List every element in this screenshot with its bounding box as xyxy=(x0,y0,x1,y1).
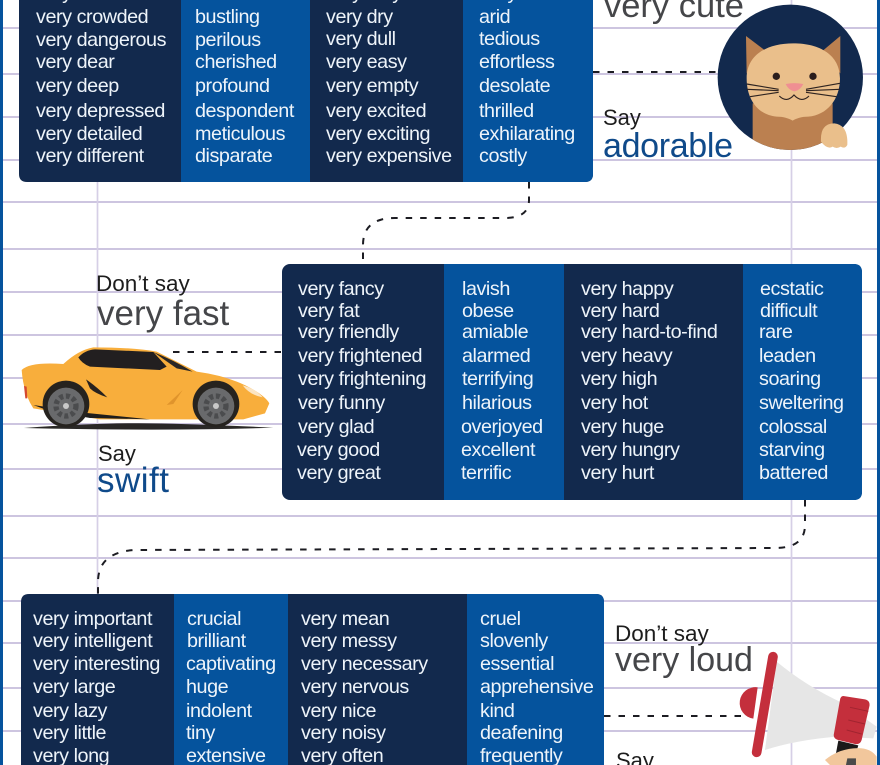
column: very words B: very empty xyxy=(326,75,419,97)
connector: panel 1 to panel 2 xyxy=(363,182,529,264)
column: synonyms C: obese xyxy=(462,300,514,322)
column: very words F: very messy xyxy=(301,630,397,652)
column: synonyms B: costly xyxy=(479,145,527,167)
column: synonyms D xyxy=(759,278,844,484)
column: synonyms E: tiny xyxy=(186,722,216,744)
column: synonyms C: hilarious xyxy=(462,392,532,414)
column: synonyms D: battered xyxy=(759,462,828,484)
column: synonyms C: excellent xyxy=(461,439,536,461)
panel: bottom word table xyxy=(21,594,604,765)
column: very words C: very funny xyxy=(298,392,385,414)
connector: panel 2 to panel 3 xyxy=(98,500,805,594)
column: very words F: very nice xyxy=(301,700,377,722)
column: very words F: very necessary xyxy=(301,653,428,675)
column: very words C: very great xyxy=(297,462,381,484)
connector: megaphone xyxy=(604,715,744,717)
column: synonyms D: soaring xyxy=(759,368,821,390)
column: very words A: very detailed xyxy=(36,123,142,145)
column: synonyms C: lavish xyxy=(462,278,510,300)
column: synonyms B xyxy=(479,0,575,167)
icon: cat xyxy=(718,5,863,153)
column: synonyms E: brilliant xyxy=(187,630,247,652)
column: synonyms E: captivating xyxy=(186,653,276,675)
heading: don't say very loud: very loud xyxy=(615,641,753,679)
column: synonyms F: slovenly xyxy=(480,630,548,652)
column: synonyms B: exhilarating xyxy=(479,123,575,145)
column: very words D: very hard xyxy=(581,300,659,322)
heading: don't say very fast xyxy=(96,271,230,333)
column: synonyms A: cherished xyxy=(195,51,277,73)
column: very words E: very large xyxy=(33,676,116,698)
column: synonyms F: apprehensive xyxy=(480,676,594,698)
column: synonyms F xyxy=(480,608,594,765)
column: synonyms B: thrilled xyxy=(479,100,534,122)
column: very words C: very fancy xyxy=(298,278,384,300)
panel: top word table xyxy=(19,0,593,182)
column: synonyms C: overjoyed xyxy=(461,416,543,438)
column: synonyms E: crucial xyxy=(187,608,241,630)
column: very words D: very heavy xyxy=(581,345,673,367)
column: very words D: very hurt xyxy=(581,462,655,484)
column: synonyms D: ecstatic xyxy=(760,278,824,300)
column: very words A xyxy=(36,0,167,167)
column: very words A: very dangerous xyxy=(36,29,167,51)
column: very words B: very excited xyxy=(326,100,426,122)
column: very words C: very frightened xyxy=(298,345,422,367)
column: very words D xyxy=(581,278,717,484)
heading: say swift xyxy=(97,441,169,500)
heading: say swift: swift xyxy=(97,461,169,500)
icon: sports car xyxy=(22,347,273,430)
column: very words E: very important xyxy=(33,608,153,630)
column: synonyms B: desolate xyxy=(479,75,551,97)
column: synonyms B: effortless xyxy=(479,51,555,73)
column: very words E: very intelligent xyxy=(33,630,153,652)
heading: say swift: Say xyxy=(98,441,136,466)
column: very words A: very dear xyxy=(36,51,115,73)
column: synonyms C: terrifying xyxy=(462,368,533,390)
column: synonyms C: alarmed xyxy=(462,345,530,367)
column: synonyms D: sweltering xyxy=(759,392,844,414)
column: very words B: very expensive xyxy=(326,145,452,167)
column: synonyms F: essential xyxy=(480,653,554,675)
connector: cat xyxy=(593,71,720,73)
column: synonyms D: colossal xyxy=(759,416,827,438)
heading: say adorable: adorable xyxy=(603,127,733,165)
heading: say adorable xyxy=(603,105,733,165)
column: synonyms A: despondent xyxy=(195,100,295,122)
column: very words D: very high xyxy=(581,368,657,390)
heading: say adorable: Say xyxy=(603,105,641,130)
column: very words D: very huge xyxy=(581,416,664,438)
column: very words B: very easy xyxy=(326,51,407,73)
column: synonyms F: deafening xyxy=(480,722,563,744)
column: very words E: very little xyxy=(33,722,107,744)
column: synonyms D: leaden xyxy=(759,345,816,367)
icon: megaphone xyxy=(740,657,877,765)
heading: don't say very fast: Don’t say xyxy=(96,271,191,296)
column: very words D: very hungry xyxy=(581,439,680,461)
column: synonyms A: profound xyxy=(195,75,270,97)
column: very words D: very hard-to-find xyxy=(581,321,717,343)
column: very words C: very good xyxy=(297,439,380,461)
column: synonyms A: disparate xyxy=(195,145,273,167)
column: very words F: very noisy xyxy=(301,722,386,744)
column: very words C: very friendly xyxy=(298,321,399,343)
column: very words F xyxy=(301,608,428,765)
column: very words D: very hot xyxy=(581,392,649,414)
column: synonyms E xyxy=(186,608,276,765)
column: synonyms D: starving xyxy=(759,439,825,461)
column: synonyms B: arid xyxy=(479,6,510,28)
column: very words A: very crowded xyxy=(36,6,148,28)
panel: middle word table xyxy=(282,264,862,500)
column: synonyms C: terrific xyxy=(461,462,512,484)
column: very words B xyxy=(326,0,452,167)
column: very words C xyxy=(297,278,426,484)
column: synonyms A xyxy=(195,0,295,167)
column: very words B: very dull xyxy=(326,28,396,50)
column: very words E: very lazy xyxy=(33,700,108,722)
column: synonyms B: tedious xyxy=(479,28,540,50)
column: very words C: very fat xyxy=(298,300,360,322)
column: very words A: very deep xyxy=(36,75,119,97)
column: synonyms E: indolent xyxy=(186,700,253,722)
column: very words E xyxy=(33,608,160,765)
column: synonyms A: perilous xyxy=(195,29,261,51)
column: synonyms A: bustling xyxy=(195,6,260,28)
column: very words C: very frightening xyxy=(298,368,426,390)
column: very words C: very glad xyxy=(298,416,374,438)
column: synonyms F: kind xyxy=(480,700,514,722)
column: synonyms A: meticulous xyxy=(195,123,286,145)
column: very words F: very mean xyxy=(301,608,389,630)
heading: don't say very loud: Don’t say xyxy=(615,621,710,646)
column: very words E: very interesting xyxy=(33,653,160,675)
column: synonyms D: difficult xyxy=(760,300,818,322)
column: very words F: very nervous xyxy=(301,676,409,698)
column: very words A: very depressed xyxy=(36,100,165,122)
column: very words B: very exciting xyxy=(326,123,430,145)
column: very words A: very different xyxy=(36,145,145,167)
heading: don't say very loud xyxy=(615,621,753,679)
column: synonyms F: cruel xyxy=(480,608,521,630)
column: synonyms C: amiable xyxy=(462,321,529,343)
column: very words D: very happy xyxy=(581,278,674,300)
column: synonyms E: huge xyxy=(186,676,229,698)
heading: don't say very fast: very fast xyxy=(97,294,230,333)
column: synonyms D: rare xyxy=(759,321,793,343)
column: very words B: very dry xyxy=(326,6,393,28)
connector: car xyxy=(173,351,282,353)
column: synonyms C xyxy=(461,278,543,484)
